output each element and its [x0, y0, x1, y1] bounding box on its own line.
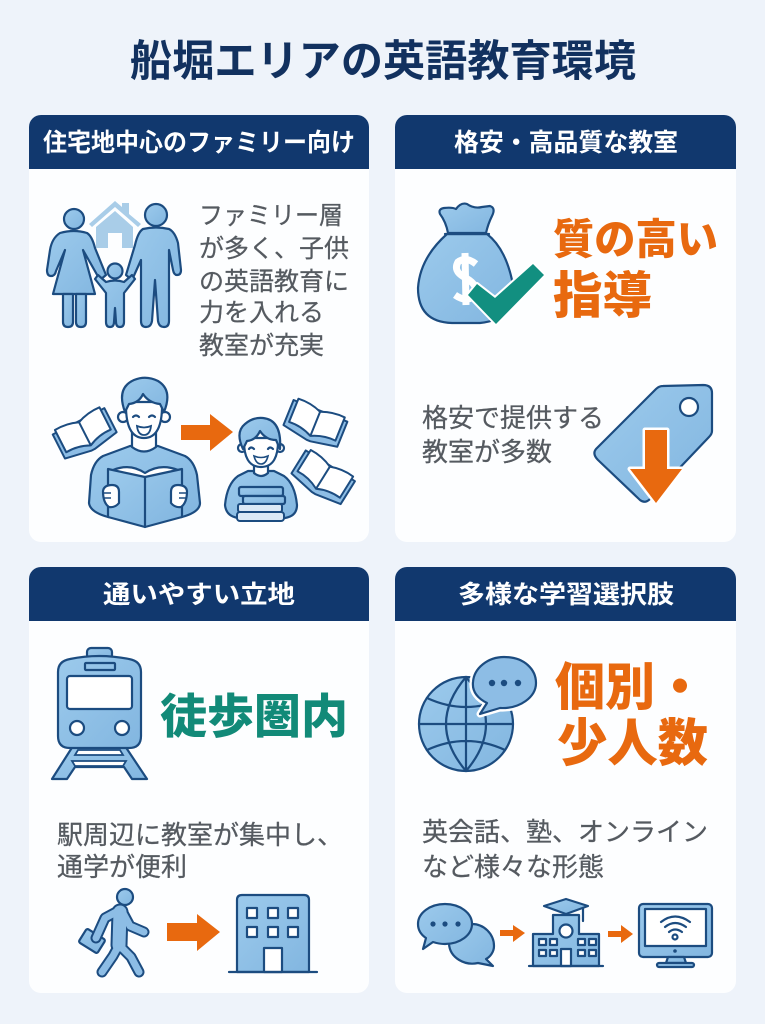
arrow: conversation to school	[500, 925, 525, 942]
text: formats	[422, 817, 708, 882]
icon: train	[52, 648, 147, 779]
icon: money bag with check mark	[418, 204, 544, 324]
icon: monitor with wifi	[639, 904, 712, 967]
panel: affordable high quality classrooms	[395, 115, 736, 542]
text: formats: など様々な形態	[422, 852, 604, 882]
panel header: 格安・高品質な教室	[454, 129, 678, 157]
panel header: 多様な学習選択肢	[458, 581, 674, 609]
panel header	[29, 115, 369, 169]
text: station area classrooms	[57, 820, 343, 882]
text: affordable classrooms: 教室が多数	[422, 437, 552, 467]
arrow: walk to building	[167, 914, 220, 951]
icon: globe with speech bubble	[419, 657, 536, 771]
text: family description: の英語教育に	[199, 268, 349, 296]
text: affordable classrooms	[422, 403, 604, 467]
icon: walking person with briefcase	[78, 889, 144, 972]
icon: conversation bubbles	[418, 904, 494, 966]
callout: high quality teaching	[553, 216, 718, 324]
icon: open book left	[51, 405, 119, 463]
arrow: school to online	[608, 925, 633, 943]
panel header	[395, 567, 736, 621]
icon: child holding books	[225, 418, 297, 521]
icon: price tag with down arrow	[594, 385, 712, 503]
arrow: parent to child	[181, 414, 233, 451]
text: station area classrooms: 通学が便利	[57, 852, 187, 882]
callout: high quality teaching: 質の高い	[553, 216, 718, 263]
panel: diverse learning options	[395, 567, 736, 993]
panel: convenient location	[29, 567, 369, 993]
callout: individual and small group: 個別・	[555, 659, 705, 716]
icon: school with graduation cap	[529, 899, 603, 966]
callout: individual and small group: 少人数	[557, 715, 708, 772]
icon: open book upper right	[282, 397, 349, 451]
icon: school building	[229, 895, 317, 972]
callout: individual and small group	[555, 659, 708, 772]
text: family description: 教室が充実	[199, 332, 324, 360]
panel: family-oriented residential area	[29, 115, 369, 542]
icon: parent reading a book	[89, 378, 200, 527]
icon: family and house	[47, 201, 181, 327]
panel header	[395, 115, 736, 169]
callout: high quality teaching: 指導	[553, 268, 652, 324]
text: family description: ファミリー層	[199, 202, 343, 230]
icon: open book lower right	[289, 448, 357, 508]
panel header: 通いやすい立地	[103, 581, 295, 609]
panel header: 住宅地中心のファミリー向け	[43, 129, 355, 157]
panel header	[29, 567, 369, 621]
text: family description: 力を入れる	[199, 299, 324, 327]
title: 船堀エリアの英語教育環境	[130, 38, 636, 86]
callout: within walking distance: 徒歩圏内	[160, 690, 348, 743]
text: station area classrooms: 駅周辺に教室が集中し、	[57, 820, 343, 850]
text: family description: が多く、子供	[199, 235, 349, 263]
text: family description	[199, 202, 349, 360]
text: affordable classrooms: 格安で提供する	[422, 403, 604, 433]
text: formats: 英会話、塾、オンライン	[422, 817, 708, 847]
